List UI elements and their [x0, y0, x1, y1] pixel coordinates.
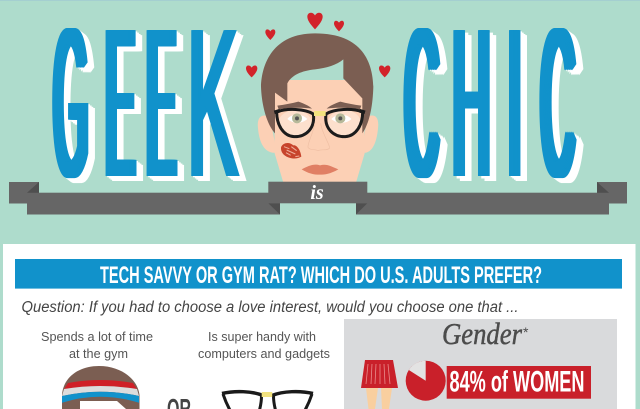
- section header bar: [15, 259, 622, 289]
- eyes: [278, 110, 361, 137]
- ribbon right tail: [597, 182, 627, 204]
- title word: CHIC: [401, 0, 584, 220]
- white content card: [3, 244, 636, 409]
- ribbon left tail: [9, 182, 39, 204]
- ribbon right band: [356, 193, 609, 214]
- nose: [308, 123, 330, 151]
- option label: gym: Spends a lot of time: [41, 330, 153, 344]
- pie chart: 84 percent: [406, 361, 446, 401]
- eyebrows: [277, 102, 361, 109]
- ribbon banner: [9, 182, 627, 214]
- icon: hearts: [246, 13, 390, 77]
- glasses: [274, 109, 365, 137]
- title word: GEEK: [50, 0, 246, 220]
- icon: woman in skirt: [361, 360, 398, 409]
- asterisk: *: [523, 324, 529, 340]
- face and ears: [258, 80, 378, 183]
- kiss mark: [281, 143, 301, 159]
- option label: gym: at the gym: [69, 347, 128, 361]
- top edge line: [0, 0, 640, 1]
- word: is: is: [310, 182, 324, 204]
- panel: gender: [344, 316, 617, 409]
- option label: computers: computers and gadgets: [198, 347, 330, 361]
- option label: computers: [198, 330, 330, 361]
- portrait: geek face with hearts: [246, 13, 390, 183]
- ribbon center: [268, 182, 367, 203]
- lips: [302, 165, 338, 175]
- hair: [261, 33, 373, 133]
- option label: gym: [41, 330, 153, 361]
- question text: Question: If you had to choose a love interest, would you choose one that ...: [22, 299, 518, 316]
- icon: glasses: [222, 392, 313, 409]
- option label: computers: Is super handy with: [208, 330, 316, 344]
- ribbon left band: [27, 193, 280, 214]
- icon: gym head with sweatband: [62, 366, 140, 409]
- gender heading: Gender: [442, 316, 523, 351]
